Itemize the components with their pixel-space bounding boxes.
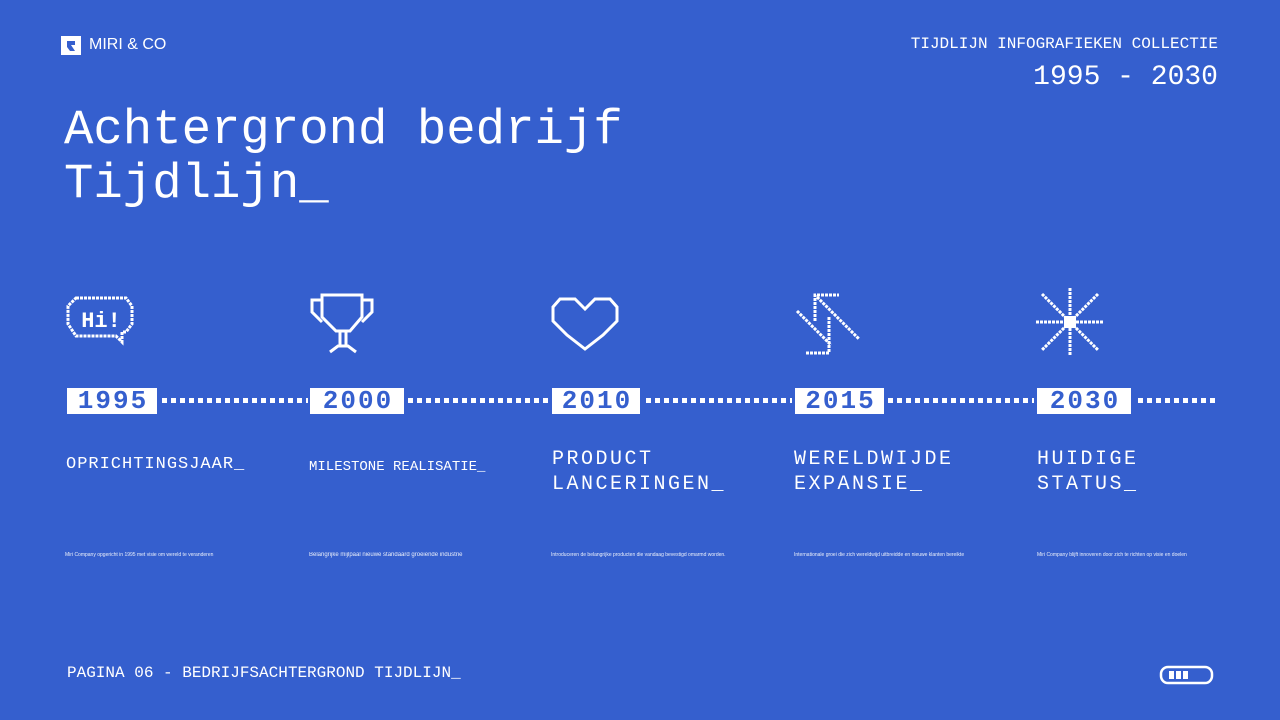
label 2010 <box>552 448 726 496</box>
label 2015 <box>794 448 954 496</box>
desc 2015: Internationale groei die zich wereldwijd uitbreidde en nieuwe klanten bereikte <box>794 552 964 558</box>
desc 2000: Belangrijke mijlpaal nieuwe standaard groeiende industrie <box>309 552 462 558</box>
logo <box>61 36 166 55</box>
title: Tijdlijn_ <box>64 156 329 212</box>
icon: heart <box>552 298 618 351</box>
label 2015: WERELDWIJDE <box>794 448 954 471</box>
label 2030: HUIDIGE <box>1037 448 1139 471</box>
icon: trophy <box>310 294 374 354</box>
desc 1995: Miri Company opgericht in 1995 met visie om wereld te veranderen <box>65 552 213 558</box>
icon: speech bubble Hi: Hi! <box>81 309 121 334</box>
year: 2010: 2010 <box>562 386 632 416</box>
label 2030: STATUS_ <box>1037 473 1139 496</box>
title: Achtergrond bedrijf <box>64 102 623 158</box>
label 2030 <box>1037 448 1139 496</box>
timeline <box>67 386 1215 416</box>
year: 2030 <box>1037 388 1131 414</box>
icon: battery <box>1160 666 1214 684</box>
year: 2015: 2015 <box>805 386 876 416</box>
year: 1995: 1995 <box>78 386 148 416</box>
logo: MIRI & CO <box>89 36 166 53</box>
year: 2030: 2030 <box>1050 386 1120 416</box>
label 2015: EXPANSIE_ <box>794 473 925 496</box>
footer: page label: PAGINA 06 - BEDRIJFSACHTERGROND TIJDLIJN_ <box>67 664 461 682</box>
header: year range: 1995 - 2030 <box>1033 62 1218 93</box>
icon: logo mark <box>61 36 81 55</box>
desc 2010: Introduceren de belangrijke producten die vandaag bevestigd omarmd worden. <box>551 552 726 558</box>
icon: speech bubble Hi <box>66 296 134 346</box>
year: 2000 <box>310 388 404 414</box>
year: 1995 <box>67 388 157 414</box>
label 1995: OPRICHTINGSJAAR_ <box>66 455 245 474</box>
label 2010: LANCERINGEN_ <box>552 473 726 496</box>
header: collection label: TIJDLIJN INFOGRAFIEKEN COLLECTIE <box>911 35 1218 53</box>
icon: arrows <box>796 294 860 354</box>
label 2010: PRODUCT <box>552 448 654 471</box>
icon: sparkle <box>1036 288 1103 355</box>
label 2000: MILESTONE REALISATIE_ <box>309 459 485 475</box>
title <box>64 102 623 212</box>
desc 2030: Miri Company blijft innoveren door zich te richten op visie en doelen <box>1037 552 1187 558</box>
year: 2000: 2000 <box>323 386 393 416</box>
